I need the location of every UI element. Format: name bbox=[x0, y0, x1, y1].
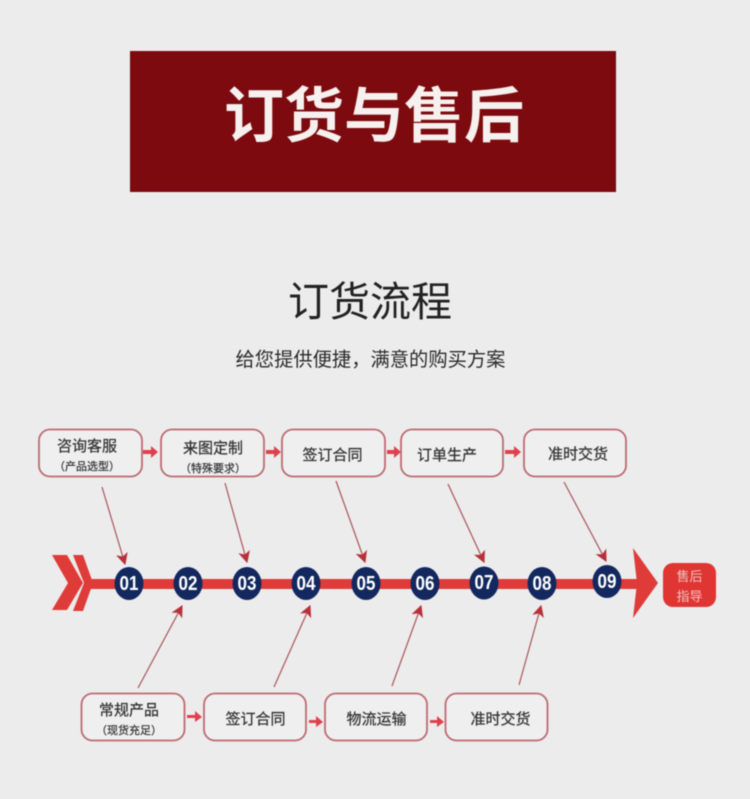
numbered nodes: 06 bbox=[416, 572, 434, 594]
step box: logistics: 物流运输 bbox=[346, 711, 407, 728]
step box: custom drawing: 来图定制 bbox=[183, 440, 243, 457]
step box: sign contract bbox=[204, 694, 306, 740]
step box: sign contract bbox=[282, 430, 385, 476]
small arrows between bottom boxes bbox=[187, 711, 444, 727]
step box: regular products bbox=[82, 694, 184, 740]
step box: inquiry: 咨询客服 bbox=[57, 438, 117, 455]
after-sales badge: 售后 bbox=[676, 569, 703, 584]
step box: inquiry bbox=[39, 430, 142, 476]
step box: custom drawing bbox=[161, 430, 264, 476]
top process row bbox=[39, 430, 626, 476]
numbered nodes bbox=[114, 565, 622, 600]
step box: on-time delivery: 准时交货 bbox=[470, 710, 531, 728]
numbered nodes: 05 bbox=[357, 572, 375, 594]
step box: production bbox=[401, 430, 503, 476]
connector arrows from top row to timeline bbox=[102, 481, 606, 564]
numbered nodes: 03 bbox=[238, 572, 256, 594]
title banner bbox=[130, 51, 616, 192]
numbered nodes: 02 bbox=[179, 572, 197, 594]
numbered nodes: 09 bbox=[598, 570, 616, 592]
subtitle: 给您提供便捷，满意的购买方案 bbox=[236, 349, 505, 371]
timeline bbox=[52, 548, 716, 618]
step box: custom drawing: （特殊要求） bbox=[180, 461, 246, 475]
step box: regular products: 常规产品 bbox=[99, 702, 159, 719]
numbered nodes: 01 bbox=[120, 572, 138, 594]
small arrows between top boxes bbox=[143, 446, 521, 458]
timeline bar bbox=[90, 579, 640, 589]
heading: ordering process: 订货流程 bbox=[288, 279, 452, 325]
numbered nodes: 07 bbox=[475, 571, 493, 593]
step box: on-time delivery bbox=[524, 430, 626, 476]
step box: logistics bbox=[325, 694, 427, 740]
after-sales badge: 指导 bbox=[676, 589, 703, 604]
arrow head end bbox=[633, 548, 658, 618]
step box: on-time delivery bbox=[446, 694, 548, 740]
bottom process row bbox=[82, 694, 548, 740]
step box: inquiry: （产品选型） bbox=[54, 459, 120, 473]
numbered nodes: 04 bbox=[297, 572, 316, 594]
step box: on-time delivery: 准时交货 bbox=[548, 445, 608, 463]
double chevron start bbox=[52, 555, 93, 611]
after-sales badge bbox=[663, 563, 716, 607]
numbered nodes: 08 bbox=[533, 572, 551, 594]
step box: production: 订单生产 bbox=[417, 447, 477, 464]
step box: sign contract: 签订合同 bbox=[302, 447, 363, 464]
step box: regular products: （现货充足） bbox=[96, 723, 162, 737]
step box: sign contract: 签订合同 bbox=[225, 711, 286, 728]
connector arrows from bottom row to timeline bbox=[138, 606, 541, 688]
title banner: 订货与售后 bbox=[224, 83, 524, 150]
